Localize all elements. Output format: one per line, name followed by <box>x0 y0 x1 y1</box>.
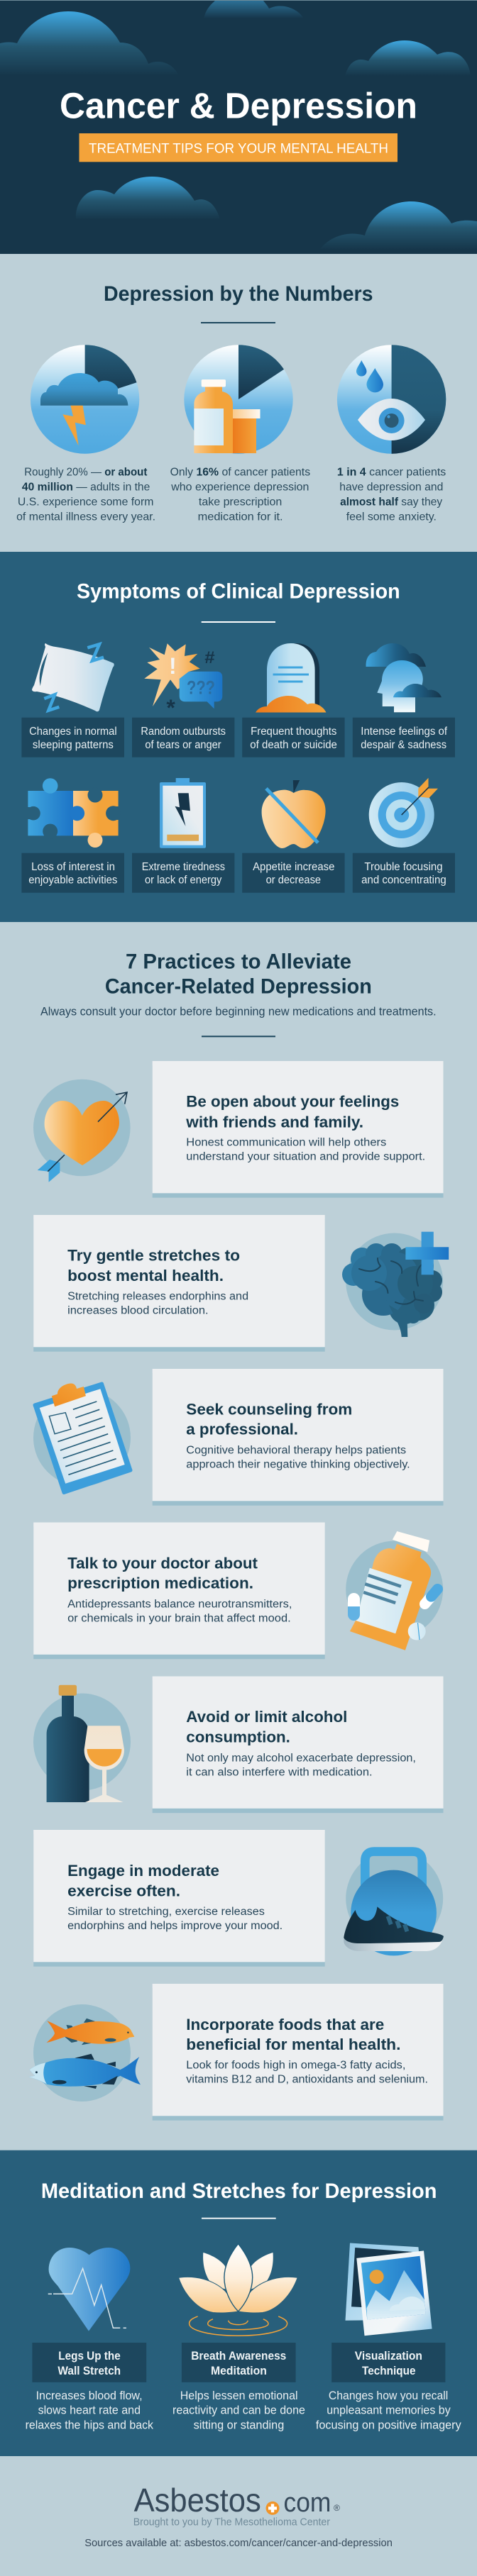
stat 2 text: who experience depression <box>170 482 309 494</box>
cloud: top center <box>204 1 304 18</box>
symptom: despair and sadness: Intense feelings of <box>361 726 448 738</box>
stat 1: pie chart 20 percent with storm cloud <box>31 345 139 454</box>
icon: starburst and speech bubble: ??? <box>187 677 215 698</box>
item: legs up the wall stretch: Increases blood flow, <box>36 2389 143 2402</box>
card: vitamins B12 and D, antioxidants and selenium. <box>186 2074 428 2086</box>
icon: heart with arrow <box>33 1079 131 1182</box>
logo: Asbestos <box>134 2482 261 2519</box>
item: visualization technique: focusing on positive imagery <box>316 2419 461 2431</box>
stat 3 text: have depression and <box>339 482 443 494</box>
card: it can also interfere with medication. <box>186 1766 373 1778</box>
symptom: loss of interest <box>21 778 124 893</box>
sources: Sources available at: asbestos.com/cancer/cancer-and-depression <box>84 2537 393 2549</box>
symptom: loss of interest: Loss of interest in <box>31 861 115 873</box>
tagline: Brought to you by The Mesothelioma Center <box>133 2517 330 2528</box>
practice 2 <box>33 1215 449 1352</box>
symptom: thoughts of death <box>242 643 345 757</box>
icon: tombstone <box>256 643 327 712</box>
symptom: appetite: Appetite increase <box>253 861 334 873</box>
stat 3 text: almost half say they <box>340 496 442 509</box>
subtitle banner <box>80 133 398 162</box>
stat 1 text: 40 million — adults in the <box>22 482 150 494</box>
card: Honest communication will help others <box>186 1137 387 1149</box>
card: Avoid or limit alcohol <box>186 1708 347 1726</box>
icon: heart with pulse <box>48 2248 130 2331</box>
icon: fish <box>29 2004 141 2102</box>
cloud: upper right <box>345 40 471 76</box>
card: Cognitive behavioral therapy helps patients <box>186 1444 406 1456</box>
card <box>33 1522 325 1659</box>
stat 2 text: Only 16% of cancer patients <box>170 467 310 479</box>
panel: meditation and stretches <box>0 2150 477 2456</box>
practice 4 <box>33 1522 443 1659</box>
heading: Meditation and Stretches for Depression <box>41 2180 437 2203</box>
icon: starburst and speech bubble: * <box>166 695 175 721</box>
practice 6 <box>33 1830 444 1967</box>
icon: starburst and speech bubble: # <box>204 648 215 667</box>
item: visualization technique <box>316 2243 461 2431</box>
card: a professional. <box>186 1421 298 1438</box>
symptom: focus: and concentrating <box>361 875 446 887</box>
item: legs up the wall stretch <box>26 2248 154 2431</box>
card: understand your situation and provide support. <box>186 1151 425 1163</box>
stat 3: pie chart half with teardrops and eye <box>337 345 446 454</box>
heading: Symptoms of Clinical Depression <box>77 579 400 603</box>
icon: brain with plus <box>342 1232 449 1337</box>
card: Be open about your feelings <box>186 1093 399 1111</box>
card <box>153 1677 443 1813</box>
icon: crossed out apple <box>262 780 326 848</box>
card: consumption. <box>186 1728 290 1746</box>
stat 2 text: take prescription <box>199 496 282 509</box>
heading: Cancer-Related Depression <box>105 975 372 999</box>
symptom: appetite <box>242 780 345 893</box>
panel: symptoms of clinical depression <box>0 552 477 922</box>
symptom: thoughts of death: Frequent thoughts <box>251 726 337 738</box>
card: Look for foods high in omega-3 fatty acids, <box>186 2060 405 2072</box>
item: visualization technique: unpleasant memories by <box>327 2404 451 2417</box>
symptom: thoughts of death: of death or suicide <box>250 739 337 751</box>
item: breath awareness meditation: sitting or standing <box>194 2419 284 2431</box>
icon: clipboard <box>33 1383 131 1492</box>
symptom: sleeping patterns <box>21 643 124 757</box>
icon: low battery <box>160 778 206 848</box>
symptom: tiredness: or lack of energy <box>145 875 222 887</box>
symptom: despair and sadness <box>353 643 455 757</box>
item: legs up the wall stretch: Legs Up the <box>58 2349 121 2363</box>
icon: target with arrow <box>369 778 438 848</box>
stat 3 text <box>337 467 446 523</box>
symptom: sleeping patterns: Changes in normal <box>29 726 117 738</box>
item: legs up the wall stretch: relaxes the hips and back <box>26 2419 154 2431</box>
icon: lotus with ripples <box>179 2244 297 2336</box>
stat 1 text <box>16 467 155 523</box>
card: exercise often. <box>67 1882 180 1899</box>
subtitle banner: TREATMENT TIPS FOR YOUR MENTAL HEALTH <box>89 141 388 157</box>
stat 2 text <box>170 467 310 523</box>
symptom: tiredness: Extreme tiredness <box>142 861 225 873</box>
symptom: appetite: or decrease <box>266 875 321 887</box>
stat 1 text: of mental illness every year. <box>16 511 155 523</box>
stat 1 text: Roughly 20% — or about <box>24 467 148 479</box>
heading: Depression by the Numbers <box>104 282 373 306</box>
practice 7 <box>29 1984 443 2121</box>
card <box>153 1061 443 1198</box>
card <box>33 1215 325 1352</box>
icon: pill bottle <box>346 1531 443 1650</box>
stat 2: pie chart 16 percent with medicine bottles <box>184 345 293 454</box>
stat 3 text: feel some anxiety. <box>346 511 437 523</box>
panel: 7 practices <box>0 922 477 2150</box>
card: Engage in moderate <box>67 1862 219 1880</box>
card: Seek counseling from <box>186 1400 352 1418</box>
symptom: focus <box>353 778 455 893</box>
symptom: focus: Trouble focusing <box>364 861 443 873</box>
symptom: outbursts <box>132 643 234 757</box>
logo <box>134 2482 340 2519</box>
card <box>33 1830 325 1967</box>
cloud: lower right <box>319 201 477 250</box>
item: visualization technique: Technique <box>362 2364 416 2377</box>
item: visualization technique: Visualization <box>355 2349 422 2363</box>
icon: starburst and speech bubble: ! <box>169 653 177 679</box>
icon: wine bottle and glass <box>33 1685 131 1802</box>
card: beneficial for mental health. <box>186 2036 400 2053</box>
symptom: sleeping patterns: sleeping patterns <box>33 739 114 751</box>
stat 3 text: 1 in 4 cancer patients <box>337 467 446 479</box>
card: Try gentle stretches to <box>67 1247 240 1265</box>
item: breath awareness meditation: Breath Awareness <box>191 2349 286 2363</box>
heading: 7 Practices to Alleviate <box>126 950 351 974</box>
item: breath awareness meditation: Meditation <box>211 2364 267 2377</box>
card: Incorporate foods that are <box>186 2016 384 2033</box>
logo: ® <box>334 2503 340 2513</box>
practice 1 <box>33 1061 443 1198</box>
symptom: despair and sadness: despair & sadness <box>361 739 446 751</box>
heading <box>105 950 372 999</box>
logo: com <box>284 2488 331 2518</box>
item: legs up the wall stretch: slows heart rate and <box>38 2404 141 2417</box>
card: Similar to stretching, exercise releases <box>67 1906 265 1918</box>
card: Stretching releases endorphins and <box>67 1291 248 1303</box>
card <box>153 1984 443 2121</box>
icon: kettlebell and sneaker <box>344 1850 444 1955</box>
panel: depression by the numbers <box>0 254 477 552</box>
panel: footer <box>0 2456 477 2576</box>
blue fish <box>29 2054 141 2089</box>
orange fish <box>47 2019 134 2045</box>
item: breath awareness meditation: Helps lessen emotional <box>180 2389 298 2402</box>
icon: head with clouds <box>366 643 442 712</box>
stat 1 text: U.S. experience some form <box>18 496 153 509</box>
cloud: lower center <box>76 177 220 220</box>
card <box>153 1369 443 1506</box>
card: Antidepressants balance neurotransmitters, <box>67 1599 292 1611</box>
panel: header <box>0 0 477 254</box>
card: with friends and family. <box>185 1113 363 1131</box>
symptom: tiredness <box>132 778 234 893</box>
card: or chemicals in your brain that affect mood. <box>67 1613 291 1625</box>
card: increases blood circulation. <box>67 1305 209 1317</box>
practice 5 <box>33 1677 443 1813</box>
symptom: outbursts: Random outbursts <box>141 726 226 738</box>
card: endorphins and helps improve your mood. <box>67 1920 283 1932</box>
icon: pillow <box>32 643 114 711</box>
cloud: upper left <box>0 11 179 76</box>
item: visualization technique: Changes how you recall <box>329 2389 448 2402</box>
stat 2 text: medication for it. <box>198 511 283 523</box>
card: boost mental health. <box>67 1267 224 1284</box>
item: breath awareness meditation: reactivity and can be done <box>172 2404 305 2417</box>
item: legs up the wall stretch: Wall Stretch <box>57 2364 121 2377</box>
subheading: Always consult your doctor before beginning new medications and treatments. <box>40 1006 437 1018</box>
symptom: loss of interest: enjoyable activities <box>28 875 118 887</box>
title: Cancer & Depression <box>60 85 417 126</box>
icon: puzzle pieces <box>26 778 121 848</box>
card: Not only may alcohol exacerbate depression, <box>186 1752 416 1764</box>
card: approach their negative thinking objectively. <box>186 1458 410 1470</box>
icon: starburst and speech bubble <box>144 643 222 721</box>
card: Talk to your doctor about <box>67 1554 258 1572</box>
practice 3 <box>33 1369 443 1506</box>
icon: photographs <box>345 2243 432 2336</box>
symptom: outbursts: of tears or anger <box>145 739 221 751</box>
card: prescription medication. <box>67 1574 253 1592</box>
item: breath awareness meditation <box>172 2244 305 2431</box>
